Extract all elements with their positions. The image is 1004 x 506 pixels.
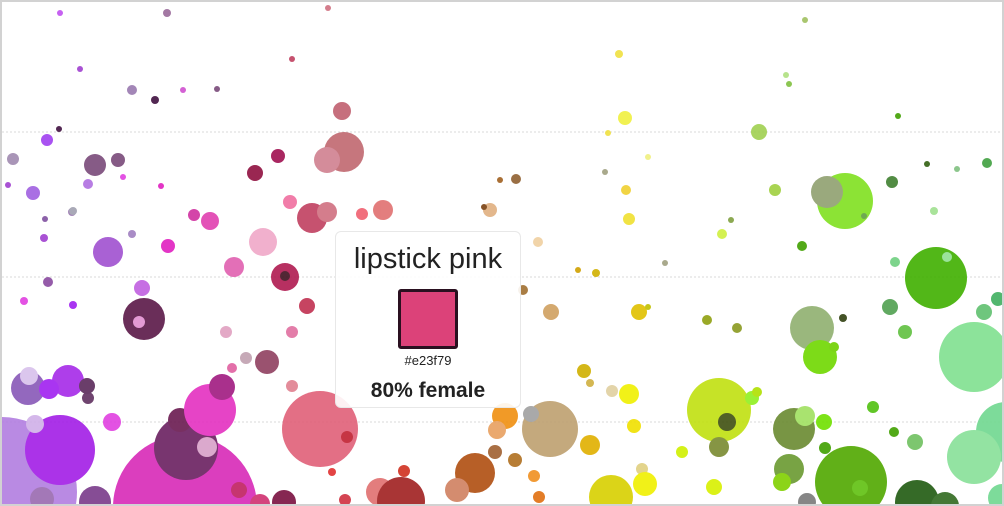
female percentage: 80% female <box>371 379 485 402</box>
tooltip: lipstick pink <box>335 231 521 408</box>
color swatch <box>398 289 458 349</box>
hex code: #e23f79 <box>404 353 452 368</box>
tooltip title: lipstick pink <box>354 243 502 275</box>
bubbles: oranges and yellows <box>445 50 668 506</box>
bubbles: purples and pinks <box>0 5 425 506</box>
bubbles: greens <box>676 17 1004 506</box>
